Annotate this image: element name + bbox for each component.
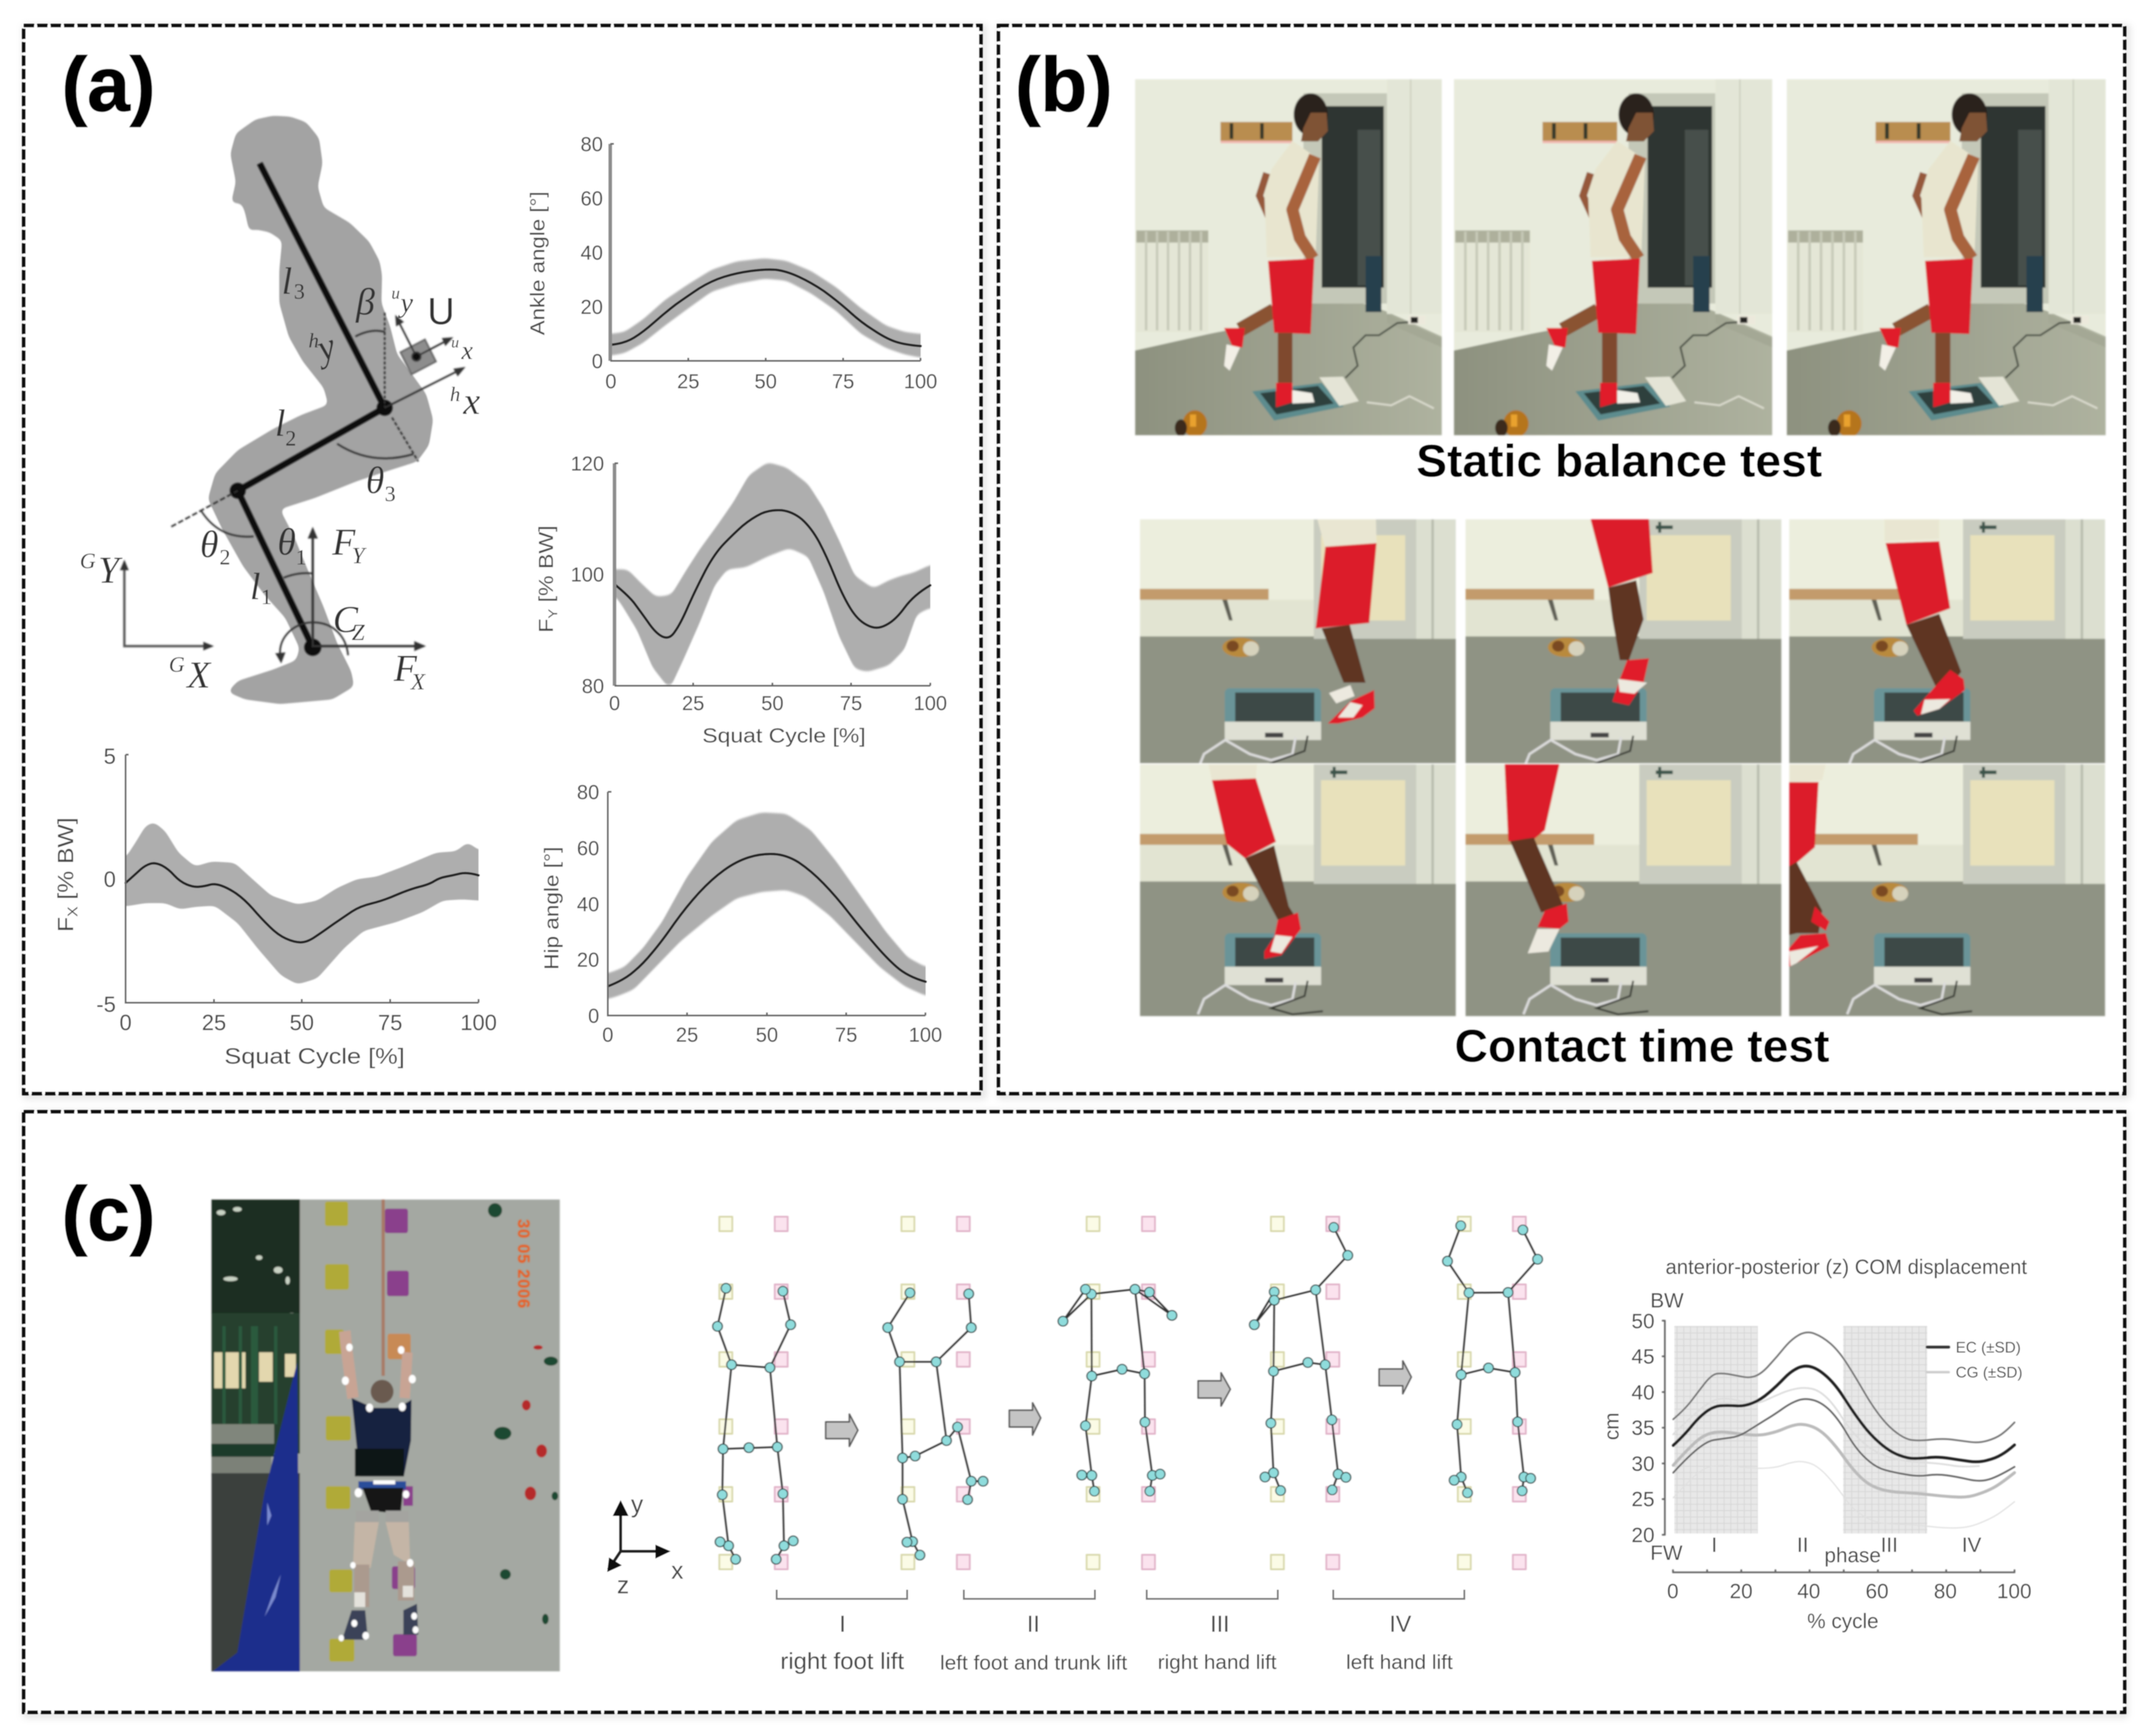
heading: (b): (b) xyxy=(1015,41,1113,127)
math labels: 1 xyxy=(296,545,307,569)
phase names: right hand lift xyxy=(1158,1651,1277,1673)
panel: b, photo sequences xyxy=(999,26,2127,1096)
COM y axis label: cm xyxy=(1600,1412,1623,1440)
COM legend: EC (±SD) xyxy=(1956,1339,2021,1356)
static balance photo strip xyxy=(1135,79,2106,437)
icon: xyz axes: z xyxy=(617,1572,629,1599)
math labels: u xyxy=(391,284,400,303)
ankle tick labels: 80 xyxy=(580,133,603,155)
math labels: G xyxy=(169,652,185,677)
COM x tick labels: 100 xyxy=(1997,1580,2031,1603)
photo date stamp: 30 05 2006 xyxy=(515,1219,533,1308)
math labels: F xyxy=(332,522,356,563)
chart: COM displacement xyxy=(1600,1256,2031,1633)
FX axes xyxy=(126,755,479,1003)
FY tick labels: 80 xyxy=(582,675,604,697)
math labels: l xyxy=(275,403,285,444)
math labels: l xyxy=(250,566,260,608)
math labels: 2 xyxy=(285,426,296,450)
math labels: Y xyxy=(98,550,123,591)
math labels: u xyxy=(451,333,459,351)
hip tick labels: 40 xyxy=(577,893,599,916)
COM direction labels: FW xyxy=(1650,1542,1683,1565)
math labels: F xyxy=(393,648,418,689)
FY axis titles: Y xyxy=(546,609,560,619)
COM y tick labels: 20 xyxy=(1631,1524,1655,1547)
math labels: y xyxy=(398,287,413,318)
COM x tick labels: 20 xyxy=(1730,1580,1753,1603)
COM legend xyxy=(1956,1339,2023,1381)
marker squares and figures 3-5 xyxy=(1058,1217,1542,1570)
chart: vertical force FY xyxy=(535,452,948,747)
heading: (a): (a) xyxy=(62,41,155,127)
chart: hip angle: 0 xyxy=(602,1023,613,1046)
FY axis titles: F xyxy=(535,621,557,633)
COM direction labels xyxy=(1650,1289,1684,1565)
chart: vertical force FY: 100 xyxy=(913,692,947,714)
math labels: h xyxy=(450,383,460,406)
math labels: y xyxy=(308,325,341,371)
chart: horizontal force FX: 50 xyxy=(290,1010,314,1035)
ankle tick labels: 60 xyxy=(580,187,603,210)
chart: hip angle: 75 xyxy=(835,1023,857,1046)
FY axes xyxy=(613,463,616,686)
FX axis titles: X xyxy=(65,906,80,917)
phase numerals xyxy=(839,1612,1412,1637)
math labels: θ xyxy=(277,522,296,563)
FX axis titles: [% BW] xyxy=(53,817,78,906)
caption: static balance test: Static balance test xyxy=(1416,435,1822,486)
math labels: β xyxy=(355,282,375,323)
COM phase labels: I xyxy=(1711,1534,1717,1557)
photo: contact frame 2 xyxy=(1466,519,1781,775)
FY tick labels: 100 xyxy=(571,563,604,586)
heading: (c): (c) xyxy=(62,1171,155,1257)
COM y tick labels xyxy=(1631,1310,1655,1547)
COM y tick labels: 25 xyxy=(1631,1488,1655,1511)
math labels: l xyxy=(282,261,292,302)
math labels: X xyxy=(185,655,212,696)
FX SD band and mean curve xyxy=(105,822,499,984)
COM direction labels: BW xyxy=(1650,1289,1684,1312)
math labels: C xyxy=(333,599,358,641)
chart: ankle angle xyxy=(526,133,939,393)
phase brackets xyxy=(777,1590,1464,1599)
COM x tick labels: 40 xyxy=(1797,1580,1820,1603)
panel: a, squat biomechanics xyxy=(24,26,983,1096)
chart: horizontal force FX: 25 xyxy=(202,1010,226,1035)
ankle tick labels: 20 xyxy=(580,296,603,318)
COM x tick labels: 60 xyxy=(1865,1580,1889,1603)
icon: xyz axes: y xyxy=(631,1491,643,1518)
math labels: 3 xyxy=(385,482,396,506)
hip axes xyxy=(608,792,925,1016)
chart: vertical force FY: Squat Cycle [%] xyxy=(702,724,866,747)
panel: c, climbing analysis xyxy=(24,1112,2125,1715)
COM y tick labels: 35 xyxy=(1631,1417,1655,1440)
math labels: h xyxy=(308,330,319,352)
photo: contact frame 5 xyxy=(1466,764,1781,1020)
ankle tick labels: 0 xyxy=(592,350,603,372)
math labels: x xyxy=(461,337,473,365)
COM y tick labels: 50 xyxy=(1631,1310,1655,1333)
COM chart title: anterior-posterior (z) COM displacement xyxy=(1666,1256,2028,1279)
math labels: X xyxy=(410,669,426,695)
FX tick labels xyxy=(96,744,116,1017)
FX tick labels: 5 xyxy=(104,744,116,769)
FX axis titles: F xyxy=(53,919,78,932)
chart: horizontal force FX: 0 xyxy=(119,1010,132,1035)
thick link segments and joints xyxy=(230,163,393,656)
photo: climber on wall xyxy=(212,1200,560,1671)
FY axis titles: [% BW] xyxy=(535,525,557,609)
chart: hip angle xyxy=(540,781,943,1046)
ankle y axis title: Ankle angle [°] xyxy=(526,191,549,335)
hip tick labels: 0 xyxy=(588,1005,599,1027)
hip SD band and mean curve xyxy=(590,813,943,999)
chart: ankle angle: 100 xyxy=(903,370,938,393)
math labels: 1 xyxy=(261,585,272,609)
chart: hip angle: 100 xyxy=(908,1023,942,1046)
phase numerals: III xyxy=(1210,1612,1230,1637)
phase numerals: IV xyxy=(1389,1612,1412,1637)
chart: ankle angle: 0 xyxy=(605,370,616,393)
FX tick labels: -5 xyxy=(96,992,116,1017)
hip y axis title: Hip angle [°] xyxy=(540,847,563,970)
ankle axes xyxy=(608,144,612,361)
math labels: θ xyxy=(366,460,384,502)
hip tick labels xyxy=(577,781,599,1027)
marker squares and figures 1-2 xyxy=(713,1217,1041,1570)
body silhouette with link model xyxy=(80,116,480,704)
phase names: right foot lift xyxy=(780,1649,904,1674)
chart: vertical force FY: 25 xyxy=(682,692,704,714)
phase names: left hand lift xyxy=(1346,1651,1453,1673)
hip tick labels: 20 xyxy=(577,948,599,971)
COM phase labels: IV xyxy=(1962,1534,1981,1557)
chart: ankle angle: 50 xyxy=(755,370,777,393)
chart: vertical force FY: 0 xyxy=(609,692,620,714)
chart: hip angle: 50 xyxy=(756,1023,778,1046)
COM y tick labels: 40 xyxy=(1631,1381,1655,1404)
math labels: Y xyxy=(352,543,367,569)
COM phase labels: II xyxy=(1797,1534,1808,1557)
COM x tick labels: 80 xyxy=(1934,1580,1957,1603)
photo: static frame 2 xyxy=(1453,78,1773,436)
COM curves and shading xyxy=(1662,1321,2014,1572)
ankle SD band and mean curve xyxy=(593,258,939,358)
ankle tick labels: 40 xyxy=(580,241,603,264)
math labels xyxy=(80,261,480,696)
FY tick labels xyxy=(571,452,604,697)
icon: xyz axes xyxy=(607,1491,683,1599)
math labels: θ xyxy=(200,524,218,566)
caption: contact time test: Contact time test xyxy=(1455,1020,1830,1072)
COM y tick labels: 30 xyxy=(1631,1453,1655,1476)
phase numerals: I xyxy=(839,1612,846,1637)
chart: horizontal force FX: 100 xyxy=(460,1010,497,1035)
photo: contact frame 3 xyxy=(1789,519,2105,775)
chart: vertical force FY: 50 xyxy=(761,692,783,714)
chart: ankle angle: 75 xyxy=(832,370,854,393)
photo: contact frame 6 xyxy=(1789,764,2105,1020)
COM phase labels: III xyxy=(1881,1534,1898,1557)
chart: hip angle: 25 xyxy=(676,1023,698,1046)
silhouette shape xyxy=(208,116,433,704)
math labels: 2 xyxy=(219,545,230,569)
photo: static frame 3 xyxy=(1786,78,2107,436)
stick figure sequence xyxy=(607,1217,1542,1674)
math labels: x xyxy=(463,381,480,422)
phase numerals: II xyxy=(1027,1612,1040,1637)
chart: vertical force FY: 75 xyxy=(840,692,862,714)
chart: horizontal force FX: Squat Cycle [%] xyxy=(224,1044,405,1069)
hip tick labels: 80 xyxy=(577,781,599,803)
chart: horizontal force FX: 75 xyxy=(378,1010,402,1035)
reference lines, arrows and angle arcs xyxy=(121,313,463,661)
FY SD band and mean curve xyxy=(616,462,932,685)
hip tick labels: 60 xyxy=(577,837,599,859)
contact time photo grid xyxy=(1140,519,2105,1020)
photo: contact frame 1 xyxy=(1140,519,1456,775)
COM phase labels: phase xyxy=(1825,1544,1881,1567)
photo: contact frame 4 xyxy=(1140,764,1456,1020)
chart: horizontal force FX xyxy=(53,744,499,1069)
COM phase labels xyxy=(1711,1534,1981,1567)
COM x axis label: % cycle xyxy=(1807,1610,1879,1633)
phase names: left foot and trunk lift xyxy=(940,1651,1127,1674)
math labels: U xyxy=(427,291,455,333)
math labels: Z xyxy=(352,620,365,646)
math labels: 3 xyxy=(294,279,305,304)
ankle tick labels xyxy=(580,133,603,372)
COM legend: CG (±SD) xyxy=(1956,1364,2023,1381)
FY tick labels: 120 xyxy=(571,452,604,475)
icon: xyz axes: x xyxy=(671,1557,683,1584)
FX tick labels: 0 xyxy=(104,867,116,892)
COM y tick labels: 45 xyxy=(1631,1345,1655,1368)
math labels: G xyxy=(80,549,96,573)
phase names xyxy=(780,1649,1453,1674)
COM x tick labels xyxy=(1667,1580,2031,1603)
COM x tick labels: 0 xyxy=(1667,1580,1678,1603)
photo: static frame 1 xyxy=(1134,78,1443,436)
chart: ankle angle: 25 xyxy=(677,370,699,393)
